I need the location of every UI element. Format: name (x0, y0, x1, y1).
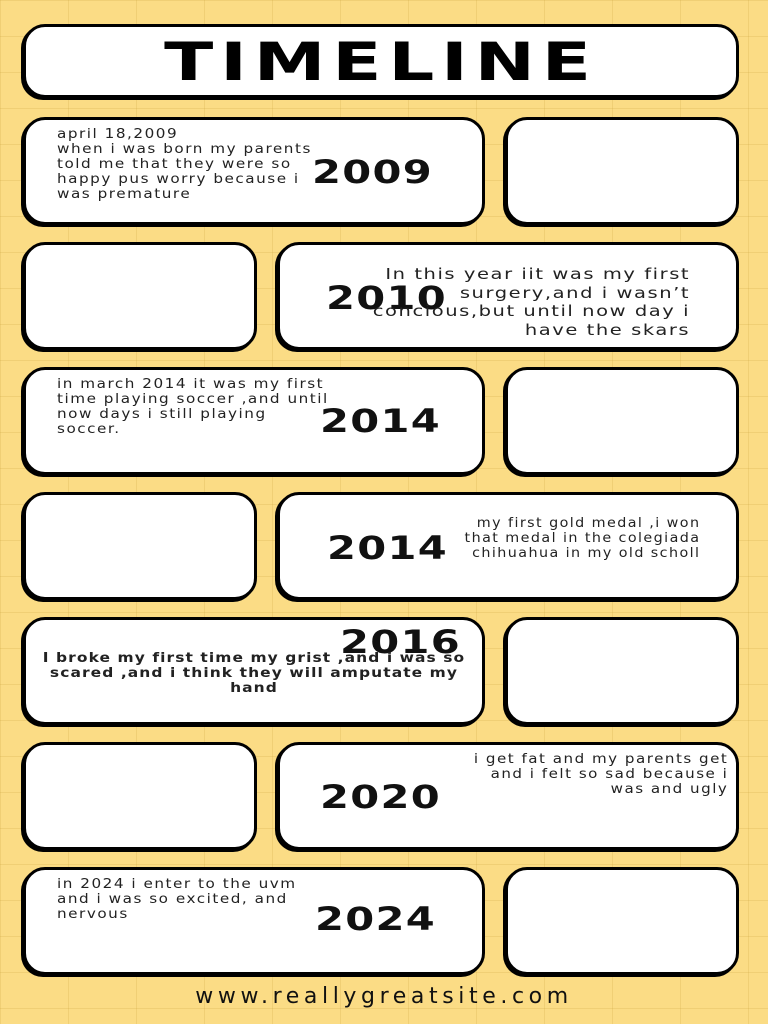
year: 2014: 2014 (327, 529, 448, 567)
text: 2024: and i was so excited, and (57, 892, 288, 907)
text: 2010: have the skars (525, 320, 690, 338)
text: 2020: i get fat and my parents get (474, 752, 728, 767)
text: 2009: april 18,2009 (57, 127, 178, 142)
photo box (23, 492, 257, 600)
text: 2014 soccer: in march 2014 it was my first (57, 377, 324, 392)
text: 2009: was premature (57, 187, 191, 202)
text: medal: my first gold medal ,i won (476, 516, 700, 531)
text: 2016: hand (230, 681, 278, 696)
text: 2024: in 2024 i enter to the uvm (57, 877, 297, 892)
photo box (505, 617, 739, 725)
title: TIMELINE (164, 32, 598, 93)
text: 2016 (43, 651, 465, 696)
text: 2009 (57, 127, 312, 202)
year: 2009: 2009 (312, 153, 433, 191)
text: 2014 soccer: soccer. (57, 422, 121, 437)
text: 2010: concious,but until now day i (373, 302, 690, 320)
panel: 2014 medal (277, 492, 739, 600)
text: 2009: when i was born my parents (57, 142, 312, 157)
year: 2024: 2024 (315, 900, 436, 938)
text: 2010 (373, 265, 690, 338)
photo box (505, 367, 739, 475)
text: 2009: happy pus worry because i (57, 172, 300, 187)
text: 2009: told me that they were so (57, 157, 292, 172)
panel: 2016 (23, 617, 485, 725)
title (23, 24, 739, 98)
text: 2024: nervous (57, 907, 129, 922)
panel: 2010 (277, 242, 739, 350)
panel: 2009 (23, 117, 485, 225)
text: 2014 soccer: time playing soccer ,and until (57, 392, 329, 407)
panel: 2020 (277, 742, 739, 850)
text: 2020 (474, 752, 728, 797)
year: 2016: 2016 (340, 623, 461, 661)
text: 2020: and i felt so sad because i (490, 767, 728, 782)
photo box (505, 867, 739, 975)
year: 2010: 2010 (326, 279, 447, 317)
panel: 2014 soccer (23, 367, 485, 475)
photo box 2010 (23, 242, 257, 350)
panel: 2024 (23, 867, 485, 975)
year: 2020: 2020 (320, 778, 441, 816)
text: medal: chihuahua in my old scholl (472, 546, 700, 561)
text: 2024 (57, 877, 297, 922)
text: 2010: surgery,and i wasn’t (460, 284, 690, 302)
text: medal: that medal in the colegiada (464, 531, 700, 546)
photo box (23, 742, 257, 850)
text: 2020: was and ugly (610, 782, 728, 797)
year: 2014: 2014 (320, 402, 441, 440)
footer url: www.reallygreatsite.com (195, 984, 573, 1009)
text: 2014 soccer (57, 377, 329, 437)
photo box 2009 (505, 117, 739, 225)
text: medal (464, 516, 700, 561)
text: 2014 soccer: now days i still playing (57, 407, 267, 422)
text: 2016: scared ,and i think they will amputate my (50, 666, 458, 681)
text: 2016: I broke my first time my grist ,and i was so (43, 651, 465, 666)
text: 2010: In this year iit was my first (385, 265, 690, 283)
